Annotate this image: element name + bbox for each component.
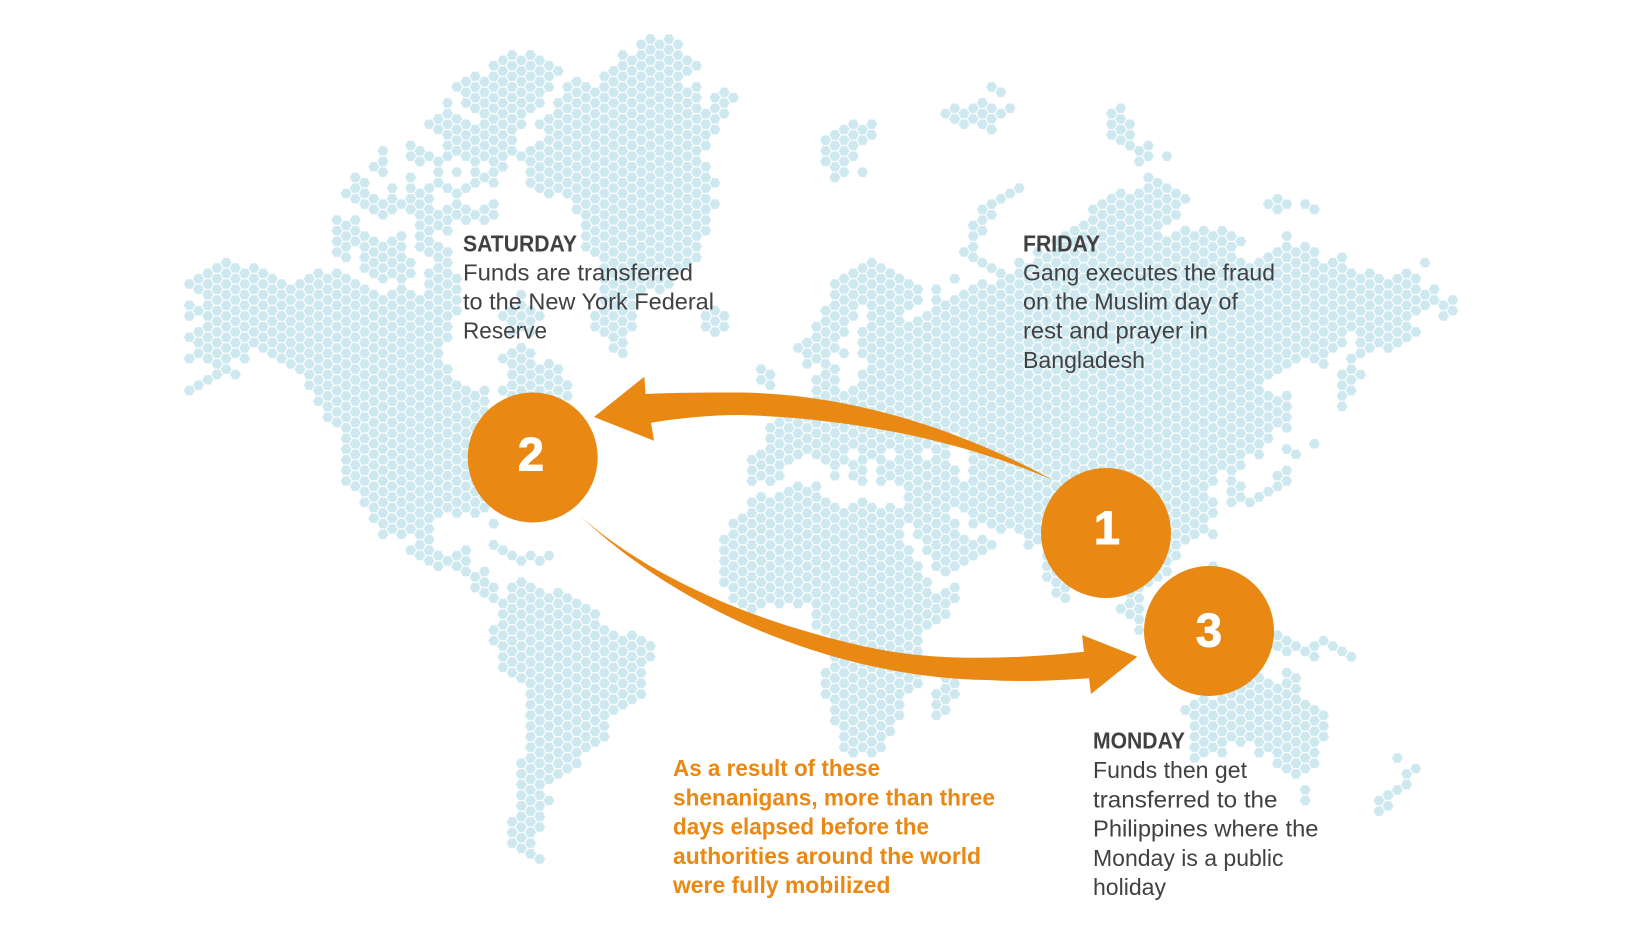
callout: orange conclusion: days elapsed before the [673,814,929,840]
arrow: step 2 to step 3 [579,515,1137,694]
marker 1 [1041,468,1171,598]
text block: Saturday: Reserve [463,318,547,344]
world map of hexagon dots [189,34,1453,864]
marker 2 [468,392,598,522]
text block: Monday: Philippines where the [1093,816,1318,842]
marker 3 [1144,566,1274,696]
callout: orange conclusion: authorities around the world [673,843,981,869]
text block: Friday: Gang executes the fraud [1023,260,1275,286]
arrow: step 1 to step 2 [594,377,1053,480]
text block: Friday: Bangladesh [1023,347,1145,373]
text block: Friday: rest and prayer in [1023,318,1208,344]
marker 1: 1 [1094,501,1120,554]
text block: Monday: holiday [1093,874,1166,900]
text block: Monday [1093,728,1318,900]
text block: Monday: Funds then get [1093,757,1248,783]
text block: Monday: Monday is a public [1093,845,1284,871]
text block: Friday [1023,231,1275,373]
text block: Saturday [463,231,714,344]
marker 3: 3 [1196,604,1222,657]
text block: Monday: transferred to the [1093,786,1278,812]
callout: orange conclusion [672,755,995,898]
callout: orange conclusion: were fully mobilized [672,872,890,898]
text block: Saturday: SATURDAY [463,231,577,257]
text block: Monday: MONDAY [1093,728,1185,754]
callout: orange conclusion: shenanigans, more than three [673,784,995,810]
text block: Saturday: Funds are transferred [463,260,693,286]
text block: Friday: FRIDAY [1023,231,1100,257]
text block: Friday: on the Muslim day of [1023,288,1239,314]
text block: Saturday: to the New York Federal [463,288,714,314]
marker 2: 2 [518,428,544,481]
callout: orange conclusion: As a result of these [673,755,880,781]
